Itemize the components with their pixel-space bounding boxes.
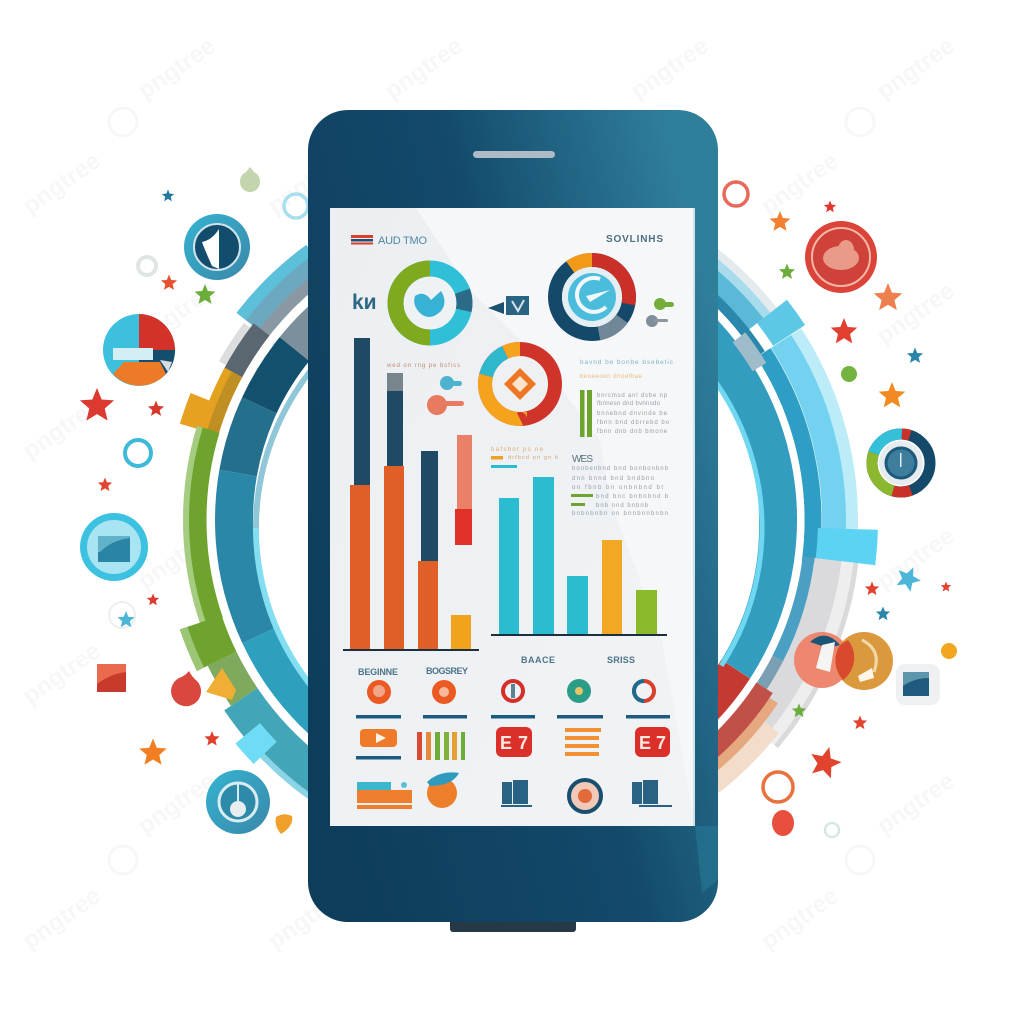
icon row 2: E7 xyxy=(639,733,666,753)
donut chart 1 xyxy=(386,259,474,347)
icon: red ring xyxy=(724,182,748,206)
text block WES: bnb nnd bnbnb xyxy=(596,503,649,509)
icon: teal power dial xyxy=(206,770,270,834)
icon: pie circle xyxy=(103,314,175,386)
star xyxy=(147,594,159,605)
star xyxy=(195,284,215,304)
table headings: BOGSREY xyxy=(426,666,468,676)
icon: cyan ring xyxy=(284,194,308,218)
icon: orange leaf xyxy=(276,814,292,834)
left decorations xyxy=(80,167,308,834)
star xyxy=(117,611,135,627)
star xyxy=(770,211,790,231)
watermark pattern: pngtree xyxy=(872,522,960,595)
ring: left outer band xyxy=(166,180,846,860)
icon: pale green drop xyxy=(240,167,260,192)
star xyxy=(876,606,890,620)
star xyxy=(792,704,806,717)
star xyxy=(892,562,925,594)
donut chart 3 xyxy=(485,349,555,419)
watermark pattern: pngtree xyxy=(872,277,960,350)
header right: SOVLINHS xyxy=(606,234,663,245)
icon: pale ring xyxy=(825,823,839,837)
phone screen xyxy=(330,208,695,826)
icon: cyan circle with card xyxy=(80,513,148,581)
text block with green bars: bnrcmsd anl dsbe np xyxy=(597,393,668,399)
text block with green bars: fbnn dnb dnb bmone xyxy=(597,429,668,435)
caption right top xyxy=(580,359,674,380)
icon: cyan ring xyxy=(125,440,151,466)
icon: white tile xyxy=(896,664,940,705)
star xyxy=(204,731,220,745)
ring: white divider xyxy=(211,225,801,815)
text block WES: dnn bnnd bnd bndbno xyxy=(572,476,655,482)
text block WES: bnbnbnbn on bnnbnnbnbn xyxy=(572,511,668,517)
icon: orange triangle xyxy=(206,668,236,700)
watermark pattern: pngtree xyxy=(133,32,221,105)
speaker xyxy=(473,151,555,158)
icon row 2 xyxy=(360,727,670,760)
table headings: BEGINNE xyxy=(358,667,398,677)
table headings: BAACE xyxy=(521,655,555,665)
star xyxy=(831,318,857,343)
icon: red drop xyxy=(171,671,201,706)
row dividers xyxy=(356,715,670,760)
text block with green bars: fbnn bnd dbrrebd bo xyxy=(597,420,670,426)
watermark pattern: pngtree xyxy=(626,32,714,105)
star xyxy=(98,478,112,491)
caption with dashes: bafsbot ps ne xyxy=(491,447,544,453)
icon: overlapping circles xyxy=(794,632,893,690)
watermark pattern: pngtree xyxy=(756,392,844,465)
icon: red flower badge xyxy=(805,221,877,293)
text block with green bars xyxy=(580,390,670,437)
icon: faint ring xyxy=(109,602,135,628)
header left: AUD TMO xyxy=(378,235,427,247)
table headings xyxy=(358,655,635,677)
text block with green bars: bnnebnd dnvinde be xyxy=(597,411,668,417)
icon: pale ring xyxy=(138,257,156,275)
star xyxy=(806,743,844,780)
icon row 2: E7 xyxy=(500,733,528,753)
icon: orange dot xyxy=(941,643,957,659)
text block WES: WES xyxy=(572,454,593,465)
star xyxy=(779,264,795,279)
watermark pattern: pngtree xyxy=(18,147,106,220)
star xyxy=(824,200,836,212)
table headings: SRISS xyxy=(607,655,635,665)
icon row 1 xyxy=(367,679,654,704)
text block WES xyxy=(571,454,669,517)
caption with dashes xyxy=(491,447,558,468)
watermark pattern: pngtree xyxy=(263,147,351,220)
watermark pattern: pngtree xyxy=(18,882,106,955)
star xyxy=(907,348,923,363)
text block with green bars: fbnnesn dnd bvnnsdo xyxy=(597,401,661,407)
star xyxy=(874,283,902,310)
watermark pattern: pngtree xyxy=(756,147,844,220)
watermark pattern: pngtree xyxy=(263,882,351,955)
caption right top: beoeeoen dnoefbae xyxy=(580,374,643,380)
watermark pattern: pngtree xyxy=(18,392,106,465)
watermark pattern: pngtree xyxy=(133,277,221,350)
text block WES: bnd bnc bnbnbnd b xyxy=(596,494,669,500)
watermark pattern: pngtree xyxy=(18,637,106,710)
watermark pattern: pngtree xyxy=(133,767,221,840)
key icons left xyxy=(427,376,464,415)
bar chart left xyxy=(343,338,479,651)
star xyxy=(148,400,164,416)
watermark pattern: pngtree xyxy=(380,32,468,105)
text block WES: on fbnb bn onbnbnd bt xyxy=(572,485,663,491)
donut chart 2 xyxy=(555,260,629,334)
star xyxy=(879,382,905,407)
text block WES: bonbenbnd bnd bonbonbnb xyxy=(572,466,669,472)
icon: orange ring xyxy=(763,772,793,802)
watermark pattern: pngtree xyxy=(872,767,960,840)
watermark pattern: pngtree xyxy=(756,637,844,710)
star xyxy=(80,388,114,421)
key icons right xyxy=(646,298,674,327)
star xyxy=(162,190,174,201)
ring: inner band xyxy=(134,148,878,892)
star xyxy=(853,716,867,729)
right decorations xyxy=(724,182,957,837)
header left xyxy=(351,235,427,247)
icon: red square xyxy=(97,664,126,692)
label: k: kᴎ xyxy=(352,291,377,314)
icon: red oval xyxy=(772,810,794,836)
watermark pattern: pngtree xyxy=(756,882,844,955)
icon: teal dial xyxy=(184,214,250,280)
watermark pattern: pngtree xyxy=(133,522,221,595)
phone body xyxy=(308,110,718,932)
star xyxy=(865,582,879,595)
icon: donut dial xyxy=(872,434,930,492)
caption right top: bavnd be bonbe bsebetic xyxy=(580,359,674,366)
star xyxy=(941,582,951,591)
star xyxy=(161,274,177,290)
watermark pattern: pngtree xyxy=(872,32,960,105)
star xyxy=(139,738,167,765)
caption with dashes: drfbcd pn gn b xyxy=(508,455,558,461)
caption above bars: wed on rng pe bsfiss xyxy=(386,363,460,369)
arrow and square icon xyxy=(488,296,529,315)
icon: green dot xyxy=(841,366,857,382)
bar chart right xyxy=(491,477,667,636)
watermark pattern: pngtree xyxy=(510,147,598,220)
icon row 3 xyxy=(357,772,672,812)
